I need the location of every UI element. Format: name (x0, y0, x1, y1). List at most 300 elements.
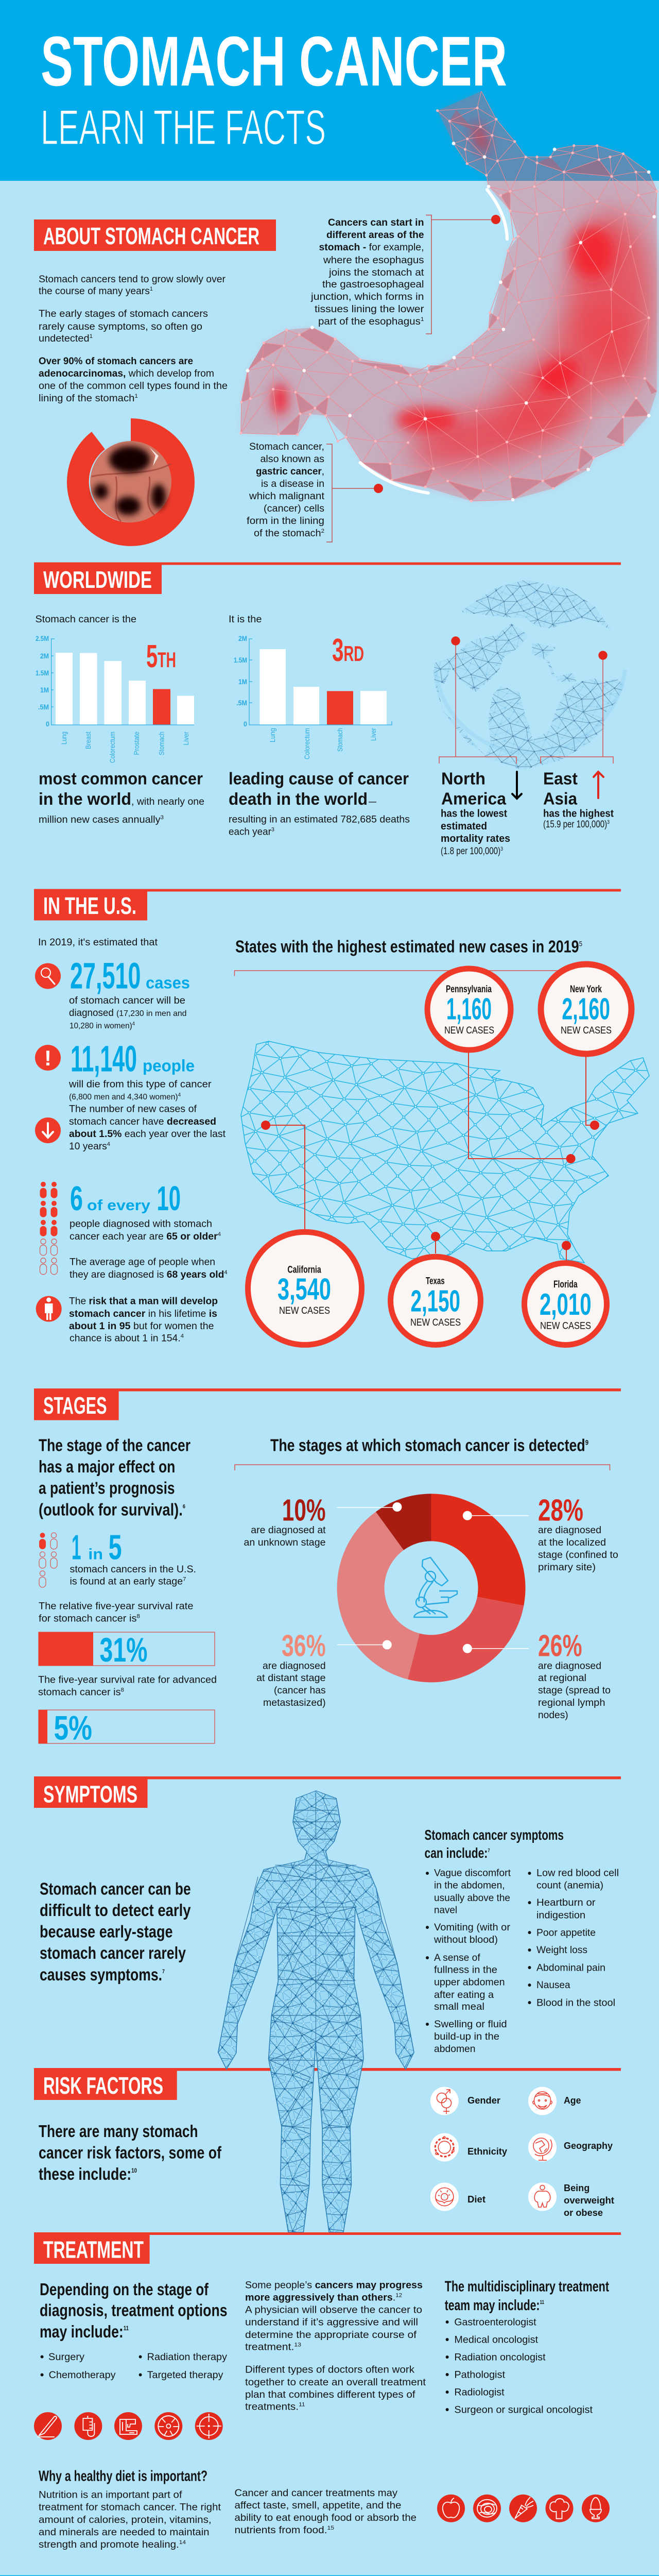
heading: about stomach cancer: ABOUT STOMACH CANCER (43, 223, 259, 249)
callout: where cancers start: junction, which forms in (310, 292, 424, 302)
callout: gastric cancer definition: which malignant (249, 491, 325, 502)
text block: effects of treatment: Cancer and cancer treatments may (235, 2488, 398, 2499)
text block: treatment options (40, 2280, 228, 2381)
title (41, 22, 507, 155)
label: 36 percent distant: (cancer has (274, 1685, 326, 1696)
label: 26 percent regional: 26% (538, 1629, 582, 1663)
chart: leading causes of cancer death: 2M (238, 634, 247, 642)
text block: u.s. statistics: people diagnosed with stomach (70, 1219, 212, 1230)
label: 36 percent distant: are diagnosed (263, 1660, 326, 1671)
icon: apple (437, 2495, 465, 2522)
state bubble: california: California (287, 1264, 321, 1275)
list: symptoms: Poor appetite (536, 1928, 596, 1939)
stat: one in five: 5 (109, 1528, 122, 1567)
text block: healthy diet: 14 (179, 2539, 186, 2546)
text block: east asia highest rate: has the highest (543, 808, 614, 820)
list: multidisciplinary team: team may include: (445, 2297, 575, 2314)
text block: east asia highest rate: Asia (543, 789, 578, 808)
text block: treatment options: diagnosis, treatment options (40, 2300, 228, 2319)
list: symptoms: small meal (434, 2002, 484, 2012)
chart: most common cancers: 2.5M (36, 634, 49, 642)
text block: treatment options: Surgery (48, 2352, 85, 2363)
text block: aggressive cancers and treatment plans: plan that combines different types of (245, 2389, 415, 2400)
stat: one in five: stomach cancers in the U.S. (70, 1564, 196, 1575)
list: symptoms: indigestion (536, 1910, 585, 1921)
text block: stage and prognosis (39, 1435, 190, 1519)
icon: egg in cup (582, 2495, 610, 2522)
icon: carrot (509, 2495, 537, 2522)
risk factor: geography: Geography (564, 2141, 613, 2151)
callout: gastric cancer definition: Stomach cancer, (249, 442, 324, 452)
text block: aggressive cancers and treatment plans: Different types of doctors often work (245, 2365, 415, 2376)
header band (0, 0, 659, 181)
text block: u.s. statistics: 4 (178, 1092, 181, 1098)
heading: about stomach cancer (34, 219, 276, 251)
text block: healthy diet (39, 2468, 221, 2550)
heading: symptoms (34, 1776, 621, 1808)
text block: about stomach cancer: adenocarcinomas, which develop from (39, 368, 214, 379)
stat bars: survival rates: The relative five-year survival rate (39, 1601, 194, 1612)
icon: exclamation: ! (44, 1046, 51, 1070)
list: symptoms: upper abdomen (434, 1977, 505, 1988)
label: 26 percent regional (538, 1629, 611, 1721)
text block: leading cause of death: – (369, 796, 377, 807)
label: 10 percent unknown stage: are diagnosed at (251, 1525, 326, 1536)
chart: most common cancers: 1M (40, 686, 49, 694)
text block: about stomach cancer: 1 (150, 286, 153, 292)
label: 36 percent distant: at distant stage (256, 1673, 326, 1684)
chart: leading causes of cancer death (229, 614, 392, 759)
text block: aggressive cancers and treatment plans: more aggressively than others . (245, 2293, 395, 2303)
callout: where cancers start: stomach - for example, (319, 242, 424, 253)
text block: u.s. statistics: (6,800 men and 4,340 women) (69, 1093, 181, 1101)
text block: stage and prognosis: (outlook for survival). (39, 1500, 212, 1519)
list: symptoms: without blood) (433, 1935, 498, 1945)
text block: about stomach cancer: undetected (39, 333, 87, 344)
list: symptoms: Stomach cancer symptoms (424, 1827, 564, 1843)
list: symptoms: count (anemia) (536, 1880, 603, 1891)
text block: hard to detect early: difficult to detect early (40, 1901, 191, 1920)
risk factor: overweight: Being (564, 2183, 589, 2193)
text block: aggressive cancers and treatment plans: determine the appropriate course of (245, 2330, 417, 2341)
heading: stages at detection: The stages at which stomach cancer is detected (270, 1435, 659, 1454)
list: multidisciplinary team: Surgeon or surgical oncologist (454, 2404, 593, 2415)
state bubble: pennsylvania: Pennsylvania (446, 984, 492, 995)
list: multidisciplinary team (445, 2279, 609, 2415)
state bubble: florida: NEW CASES (540, 1321, 591, 1331)
text block: north america lowest rate: mortality rates (441, 833, 510, 844)
risk factor: ethnicity: Ethnicity (467, 2146, 507, 2157)
icon: cancer cell donut (67, 418, 195, 546)
state bubble: texas: NEW CASES (410, 1317, 461, 1328)
text block: treatment options: may include: (40, 2322, 144, 2341)
text block: healthy diet: and minerals are needed to maintain (39, 2527, 209, 2538)
text block: healthy diet: amount of calories, protein, vitamins, (39, 2515, 212, 2526)
stat bars: survival rates: 31% (100, 1631, 147, 1669)
stat bars: survival rates: 8 (121, 1687, 124, 1693)
stat bars: survival rates: for stomach cancer is (39, 1614, 132, 1624)
text block: healthy diet: Nutrition is an important part of (39, 2490, 182, 2501)
chart: most common cancers (35, 614, 194, 763)
label: 26 percent regional: regional lymph (538, 1698, 605, 1708)
text block: treatment options: 11 (124, 2325, 129, 2332)
text block: u.s. statistics: 4 (218, 1231, 221, 1238)
text block: about stomach cancer (39, 274, 228, 404)
chart: leading causes of cancer death: Lung (268, 728, 276, 742)
callout: gastric cancer definition: of the stomach (254, 528, 318, 539)
text block: east asia highest rate: East (543, 769, 578, 788)
text block: hard to detect early: because early-stage (40, 1922, 173, 1941)
text block: about stomach cancer: rarely cause symptoms, so often go (39, 321, 202, 332)
callout: gastric cancer definition: gastric cancer, (256, 466, 324, 477)
text block: hard to detect early: causes symptoms. (40, 1965, 192, 1984)
chart: leading causes of cancer death: 0 (244, 720, 247, 728)
heading: treatment: TREATMENT (43, 2236, 144, 2263)
food icons row (437, 2495, 610, 2522)
text block: healthy diet: strength and promote healing. (39, 2539, 168, 2550)
list: symptoms: navel (434, 1905, 457, 1916)
callout: gastric cancer definition: is a disease in (261, 479, 324, 489)
stat bars: survival rates: stomach cancer is (38, 1687, 117, 1698)
stat bars: survival rates (38, 1601, 217, 1747)
text block: north america lowest rate: has the lowest (441, 808, 507, 820)
chart: most common cancers: 1.5M (36, 669, 49, 677)
icon: magnifier (35, 963, 61, 989)
chart: most common cancers: 2M (40, 652, 49, 660)
risk factor: overweight: overweight (564, 2195, 614, 2206)
label: 26 percent regional: are diagnosed (538, 1660, 601, 1671)
text block: effects of treatment: 15 (327, 2525, 334, 2531)
chart: most common cancers: Prostate (132, 732, 141, 755)
text block: stage and prognosis: The stage of the cancer (39, 1435, 190, 1454)
text block: u.s. statistics: of every (87, 1197, 150, 1214)
callout: where cancers start: the gastroesophageal (322, 279, 424, 290)
text block: effects of treatment: ability to eat enough food or absorb the (235, 2513, 417, 2523)
text block: most common cancer: in the world (39, 789, 131, 808)
text block: aggressive cancers and treatment plans: treatments. (245, 2402, 294, 2413)
text block: u.s. statistics: 10 years (69, 1141, 107, 1152)
chart: leading causes of cancer death: Stomach (336, 728, 344, 752)
chart: most common cancers: Lung (60, 732, 68, 744)
callout: where cancers start: 1 (421, 316, 424, 323)
text block: risk factors intro: cancer risk factors, some of (39, 2143, 222, 2162)
state bubble: new york: NEW CASES (561, 1025, 612, 1036)
text block: east asia highest rate (543, 769, 614, 830)
list: multidisciplinary team: Radiologist (454, 2387, 505, 2398)
list: symptoms: abdomen (434, 2044, 476, 2055)
list: symptoms: Low red blood cell (536, 1868, 619, 1879)
text block: healthy diet: treatment for stomach cancer. The right (39, 2502, 221, 2513)
icon: down arrow (35, 1117, 61, 1143)
text block: u.s. statistics: people (143, 1056, 195, 1075)
label: 36 percent distant: metastasized) (263, 1698, 326, 1708)
text block: north america lowest rate: North (441, 769, 485, 788)
title: LEARN THE FACTS (41, 100, 326, 155)
state bubble: new york: 2,160 (562, 992, 610, 1026)
stomach illustration (241, 91, 657, 501)
state bubble: pennsylvania: NEW CASES (444, 1025, 494, 1036)
stat: one in five: is found at an early stage (70, 1577, 179, 1587)
icon: radiation machine (114, 2412, 142, 2440)
icon: microscope (414, 1557, 457, 1617)
text block: leading cause of death: death in the world (229, 789, 368, 808)
stat bars: survival rates: 5% (54, 1709, 92, 1747)
list: multidisciplinary team: 11 (540, 2299, 544, 2306)
label: 28 percent localized (538, 1493, 618, 1573)
icon: iv bag (74, 2412, 102, 2440)
text block: north america lowest rate (441, 769, 522, 857)
text block: aggressive cancers and treatment plans: A physician will observe the cancer to (245, 2305, 422, 2316)
callout: gastric cancer definition: also known as (261, 454, 324, 465)
text block: aggressive cancers and treatment plans: 11 (299, 2402, 305, 2408)
heading: stages: STAGES (43, 1392, 107, 1419)
text block: stage and prognosis: has a major effect on (39, 1457, 175, 1476)
text block: about stomach cancer: 1 (90, 333, 93, 340)
icon: radiation symbol (154, 2412, 182, 2440)
text block: u.s. statistics: 11,140 (71, 1039, 137, 1079)
label: 10 percent unknown stage (244, 1493, 326, 1548)
text block: u.s. statistics: diagnosed (17,230 in men and (69, 1008, 186, 1019)
heading: stages at detection: 9 (585, 1438, 588, 1446)
text block: stage and prognosis: a patient’s prognosis (39, 1479, 175, 1498)
risk factor: diet: Diet (467, 2194, 485, 2205)
text block: north america lowest rate: America (441, 789, 507, 808)
icon: man (36, 1296, 62, 1322)
heading: worldwide (34, 563, 621, 594)
stat bars: survival rates: 8 (137, 1614, 140, 1620)
text block: about stomach cancer: The early stages of stomach cancers (39, 309, 208, 319)
label: 26 percent regional: stage (spread to (538, 1685, 611, 1696)
text block: effects of treatment (235, 2488, 417, 2536)
text block: about stomach cancer: the course of many years (39, 286, 148, 297)
callout: where cancers start: part of the esophagus (318, 316, 413, 327)
text block: north america lowest rate: estimated (441, 821, 487, 832)
stat: one in five: 7 (183, 1577, 186, 1583)
text block: treatment options: Radiation therapy (147, 2352, 228, 2363)
state bubble: pennsylvania: 1,160 (446, 992, 492, 1026)
text block: u.s. statistics: will die from this type of cancer (68, 1079, 212, 1090)
list: symptoms: Vague discomfort (434, 1868, 511, 1879)
text block: east asia highest rate: (15.9 per 100,000) (543, 819, 623, 830)
chart: leading causes of cancer death: It is the (229, 614, 262, 625)
label: 10 percent unknown stage: an unknown stage (244, 1537, 325, 1548)
risk factor: geography (528, 2133, 613, 2162)
heading: stages at detection (235, 1435, 610, 1470)
text block: leading cause of death: 3 (271, 827, 274, 833)
heading: symptoms: SYMPTOMS (43, 1781, 137, 1808)
text block: u.s. statistics: In 2019, it's estimated that (38, 937, 158, 948)
text block: u.s. statistics: The average age of people when (70, 1257, 215, 1268)
state connectors (261, 1053, 599, 1260)
map markers: north america and east asia (439, 636, 613, 764)
label: 26 percent regional: nodes) (538, 1710, 568, 1721)
heading: in the u.s. (34, 889, 621, 920)
text block: u.s. statistics: they are diagnosed is 68 years old (70, 1269, 223, 1280)
callout: where cancers start: where the esophagus (323, 255, 424, 266)
label: 28 percent localized: at the localized (538, 1537, 606, 1548)
text block: u.s. statistics: 6 (70, 1179, 83, 1218)
text block: u.s. statistics: about 1.5% each year over the last (69, 1129, 226, 1140)
text block: u.s. statistics: about 1 in 95 but for women the (69, 1321, 214, 1332)
stat: one in five: in (88, 1546, 103, 1563)
text block: u.s. statistics: of stomach cancer will be (69, 995, 185, 1006)
state bubble: florida: 2,010 (540, 1287, 592, 1321)
chart: leading causes of cancer death: .5M (236, 699, 247, 707)
list: symptoms: Blood in the stool (536, 1998, 615, 2008)
state bubble: new york (541, 964, 631, 1054)
text block: most common cancer (39, 769, 204, 825)
chart: most common cancers: 0 (46, 720, 49, 728)
stat bars: survival rates: The five-year survival rate for advanced (38, 1675, 217, 1686)
icon: six of ten people (40, 1182, 58, 1275)
risk factor: overweight: or obese (564, 2208, 603, 2218)
human body illustration (206, 1788, 422, 2233)
text block: leading cause of death (229, 769, 410, 838)
text block: u.s. statistics (35, 937, 228, 1344)
state bubble: pennsylvania (427, 969, 511, 1050)
list: symptoms: usually above the (434, 1893, 510, 1904)
heading: worldwide: WORLDWIDE (43, 566, 152, 593)
icon: exclamation (35, 1045, 61, 1071)
state bubble: texas: 2,150 (411, 1284, 460, 1318)
callout: gastric cancer definition: (cancer) cells (264, 503, 324, 514)
text block: u.s. statistics: stomach cancer have decreased (69, 1116, 216, 1127)
chart: most common cancers: Colorectum (108, 732, 116, 763)
stat: one in five: 1 (72, 1528, 81, 1567)
text block: treatment options: Targeted therapy (147, 2370, 223, 2381)
text block: treatment options: Chemotherapy (49, 2370, 116, 2381)
treatment icons row (34, 2412, 223, 2440)
footer band (0, 2575, 659, 2576)
risk factor: ethnicity (430, 2133, 507, 2162)
text block: about stomach cancer: lining of the stomach (39, 393, 128, 404)
chart: leading causes of cancer death: Liver (369, 728, 377, 741)
list: symptoms (424, 1827, 619, 2055)
text block: most common cancer: , with nearly one (131, 796, 204, 807)
list: symptoms: in the abdomen, (434, 1880, 505, 1891)
text block: u.s. statistics: 4 (224, 1269, 228, 1276)
state bubble: california: NEW CASES (279, 1306, 330, 1316)
state bubble: florida: Florida (553, 1279, 578, 1290)
text block: effects of treatment: nutrients from food. (235, 2525, 319, 2536)
label: 36 percent distant: 36% (282, 1629, 326, 1663)
text block: aggressive cancers and treatment plans: treatment. (245, 2342, 289, 2352)
text block: u.s. statistics: 4 (107, 1141, 110, 1147)
icon: broccoli (546, 2495, 574, 2522)
text block: u.s. statistics: stomach cancer in his lifetime is (69, 1309, 217, 1319)
risk factor: age (528, 2087, 581, 2115)
chart: leading causes of cancer death: 3RD (332, 633, 364, 668)
chart: leading causes of cancer death: 1.5M (234, 656, 247, 664)
text block: about stomach cancer: 1 (134, 393, 138, 399)
text block: aggressive cancers and treatment plans: 13 (294, 2342, 301, 2348)
text block: aggressive cancers and treatment plans: 12 (395, 2293, 402, 2299)
label: 28 percent localized: 28% (538, 1493, 583, 1527)
callout: where cancers start (310, 190, 507, 334)
chart: most common cancers: Stomach cancer is the (35, 614, 136, 625)
label: 10 percent unknown stage: 10% (282, 1493, 326, 1527)
callout: where cancers start: different areas of the (326, 230, 424, 241)
chart: most common cancers: Breast (84, 732, 92, 749)
text block: about stomach cancer: Stomach cancers tend to grow slowly over (39, 274, 226, 285)
list: multidisciplinary team: Pathologist (454, 2370, 506, 2380)
label: 26 percent regional: at regional (538, 1673, 586, 1684)
chart: most common cancers: .5M (38, 703, 49, 711)
list: symptoms: Swelling or fluid (434, 2019, 507, 2030)
heading: risk factors (34, 2068, 621, 2100)
risk factor: overweight (528, 2182, 614, 2218)
map of the united states (241, 1041, 649, 1263)
text block: leading cause of death: resulting in an estimated 782,685 deaths (229, 814, 410, 825)
risk factor: gender: Gender (467, 2095, 500, 2106)
state bubble: texas: Texas (426, 1276, 445, 1287)
text block: aggressive cancers and treatment plans (245, 2280, 426, 2413)
text block: risk factors intro: There are many stomach (39, 2122, 198, 2141)
list: symptoms: after eating a (434, 1990, 494, 2001)
list: symptoms: Abdominal pain (536, 1963, 605, 1974)
text block: leading cause of death: leading cause of cancer (229, 769, 409, 788)
callout: gastric cancer definition: form in the lining (247, 516, 324, 527)
chart: leading causes of cancer death: Colorectum (303, 728, 311, 759)
callout: where cancers start: Cancers can start in (328, 217, 424, 228)
chart: most common cancers: Liver (182, 732, 190, 745)
text block: u.s. statistics: chance is about 1 in 154. (70, 1333, 178, 1344)
text block: aggressive cancers and treatment plans: Some people’s cancers may progress (245, 2280, 423, 2291)
heading: states with highest new cases: 5 (579, 940, 582, 948)
callout: where cancers start: tissues lining the lower (315, 304, 424, 315)
callout: gastric cancer definition: 2 (321, 528, 324, 534)
text block: u.s. statistics: 4 (132, 1021, 135, 1027)
text block: hard to detect early: Stomach cancer can be (40, 1879, 191, 1898)
icon: fish (473, 2495, 501, 2522)
text block: u.s. statistics: 4 (181, 1333, 184, 1340)
label: 28 percent localized: are diagnosed (538, 1525, 601, 1536)
text block: most common cancer: most common cancer (39, 769, 203, 788)
list: multidisciplinary team: Gastroenterologist (454, 2317, 536, 2328)
text block: north america lowest rate: 3 (500, 846, 503, 852)
text block: stage and prognosis: 6 (183, 1503, 185, 1510)
text block: aggressive cancers and treatment plans: together to create an overall treatment (245, 2377, 426, 2388)
list: symptoms: can include: (424, 1845, 509, 1861)
text block: treatment options: Depending on the stage of (40, 2280, 209, 2299)
chart: most common cancers: Stomach (158, 732, 166, 755)
icon: target (195, 2412, 223, 2440)
text block: u.s. statistics: 10,280 in women) (70, 1022, 135, 1030)
chart: leading causes of cancer death: 1M (238, 677, 247, 686)
list: symptoms: A sense of (434, 1953, 480, 1963)
text block: about stomach cancer: Over 90% of stomach cancers are (39, 356, 193, 367)
text block: u.s. statistics: 10 (157, 1179, 181, 1218)
text block: hard to detect early (40, 1879, 191, 1984)
chart: most common cancers: 5TH (146, 639, 176, 674)
text block: u.s. statistics: 27,510 (70, 956, 141, 997)
label: 28 percent localized: primary site) (538, 1562, 596, 1573)
heading: states with highest new cases (235, 937, 582, 976)
text block: u.s. statistics: cases (146, 974, 190, 992)
state bubble: florida (524, 1263, 606, 1345)
donut chart: stage at diagnosis (337, 1494, 529, 1682)
text block: u.s. statistics: cancer each year are 65 or older (70, 1231, 216, 1242)
label: 28 percent localized: stage (confined to (538, 1550, 618, 1561)
stat: one in five (39, 1528, 196, 1587)
state bubble: california: 3,540 (278, 1273, 331, 1307)
state bubble: new york: New York (570, 984, 602, 995)
text block: u.s. statistics: The risk that a man will develop (69, 1296, 218, 1307)
list: symptoms: Heartburn or (536, 1897, 596, 1908)
state bubble: texas (390, 1257, 481, 1345)
callout: where cancers start: joins the stomach at (328, 267, 424, 278)
state bubble: california (248, 1232, 361, 1345)
